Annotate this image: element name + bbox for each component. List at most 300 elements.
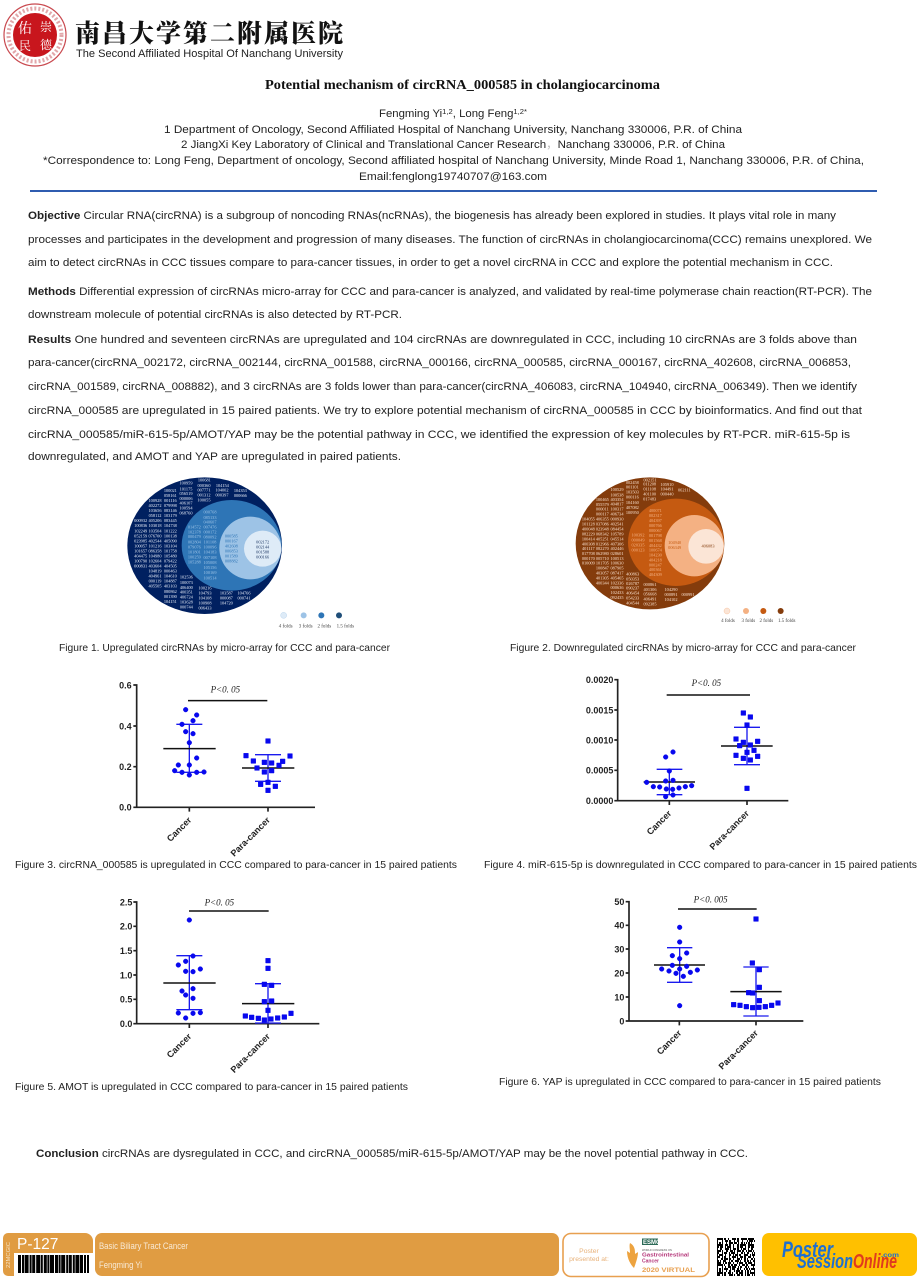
- figure 2: downregulated circRNA nested circles: 002458: [626, 480, 639, 485]
- figure 2: downregulated circRNA nested circles: 406734: [611, 512, 624, 517]
- figure 1: upregulated circRNA nested circles: 404475: [134, 553, 147, 558]
- results text block: circRNA_000585/miR-615-5p/AMOT/YAP may be the potential pathway in CCC, we identified the expression of key molecules by RT-PCR. miR-615-5p is: [28, 429, 850, 441]
- figure 1: upregulated circRNA nested circles: 104108: [199, 596, 211, 601]
- legend: fold change: 2 folds: [759, 619, 773, 624]
- figure 2: downregulated circRNA nested circles: 104940: [668, 540, 681, 545]
- figure 1: upregulated circRNA nested circles: 403103: [164, 584, 177, 589]
- figure 1: upregulated circRNA nested circles: 104738: [164, 523, 177, 528]
- footer: presented at badge: Cancer: [642, 1258, 659, 1264]
- figure 1: upregulated circRNA nested circles: 002804: [188, 539, 202, 544]
- figure 2: downregulated circRNA nested circles: 068342: [596, 531, 609, 536]
- chart: figure 3 circRNA_000585: 0.6: [119, 680, 132, 690]
- figure 2: downregulated circRNA nested circles: 404544: [626, 601, 640, 606]
- figure 2: downregulated circRNA nested circles: 406083: [702, 543, 714, 548]
- figure 2: downregulated circRNA nested circles: 400308: [582, 541, 595, 546]
- figure 2: downregulated circRNA nested circles: 401117: [582, 546, 595, 551]
- figure 1: upregulated circRNA nested circles: 000479: [188, 534, 201, 539]
- figure 1: upregulated circRNA nested circles: 103504: [149, 528, 162, 533]
- figure 2: downregulated circRNA nested circles: 026787: [626, 581, 640, 586]
- figure 1: upregulated circRNA nested circles: 102604: [149, 558, 162, 563]
- barcode: [18, 1255, 89, 1273]
- figure 1: upregulated circRNA nested circles: 000831: [134, 563, 147, 568]
- figure 2: downregulated circRNA nested circles: 400071: [649, 508, 662, 513]
- footer: poster id tab: [3, 1233, 93, 1276]
- chart: figure 6 YAP: 20: [614, 968, 624, 978]
- icon: hospital seal: 民: [19, 37, 31, 54]
- figure 2: downregulated circRNA nested circles: 101128: [582, 521, 595, 526]
- chart: figure 5 AMOT: Para-cancer: [229, 1031, 272, 1075]
- figure 1: upregulated circRNA nested circles: 104610: [164, 574, 177, 579]
- figure 1: upregulated circRNA nested circles: 102378: [188, 529, 201, 534]
- footer: presented at badge: Gastrointestinal: [642, 1252, 690, 1258]
- figure 1: upregulated circRNA nested circles: 104793: [199, 591, 211, 596]
- results text block: downregulated, and AMOT and YAP are upregulated in paired patients.: [28, 451, 401, 463]
- caption: figure 4: Figure 4. miR-615-5p is downregulated in CCC compared to para-cancer in 15 paired patients: [484, 860, 917, 871]
- title: Potential mechanism of circRNA_000585 in cholangiocarcinoma: [265, 78, 660, 93]
- figure 2: downregulated circRNA nested circles: 090237: [626, 586, 640, 591]
- figure 2: downregulated circRNA nested circles: 028601: [611, 551, 623, 556]
- figure 1: upregulated circRNA nested circles: 100681: [198, 477, 211, 482]
- figure 2: downregulated circRNA nested circles: 104491: [661, 487, 673, 492]
- figure 2: downregulated circRNA nested circles: 406491: [644, 597, 656, 602]
- figure 2: downregulated circRNA nested circles: 092435: [611, 595, 623, 600]
- figure 2: downregulated circRNA nested circles: 404432: [649, 543, 662, 548]
- figure 2: downregulated circRNA nested circles: 104160: [626, 500, 639, 505]
- footer: PosterSessionOnline logo: [762, 1233, 917, 1276]
- authors and affiliations: 1,2*: [513, 107, 527, 116]
- figure 1: upregulated circRNA nested circles: 100594: [180, 506, 193, 511]
- figure 1: upregulated circRNA nested circles: 058161: [164, 493, 177, 498]
- figure 2: downregulated circRNA nested circles: 401306: [644, 587, 657, 592]
- figure 1: upregulated circRNA nested circles: 101108: [204, 540, 216, 545]
- figure 2: downregulated circRNA nested circles: 011108: [643, 487, 656, 492]
- chart: figure 6 YAP: 50: [614, 897, 624, 907]
- figure 2: downregulated circRNA nested circles: 407306: [611, 541, 624, 546]
- chart: figure 5 AMOT: [120, 897, 319, 1075]
- figure 1: upregulated circRNA nested circles: 000006: [180, 496, 193, 501]
- chart: figure 4 miR-615-5p: 0.0005: [586, 766, 613, 776]
- figure 1: upregulated circRNA nested circles: 002144: [256, 544, 270, 549]
- figure 1: upregulated circRNA nested circles: 000585: [225, 533, 238, 538]
- figure 1: upregulated circRNA nested circles: 001589: [225, 553, 238, 558]
- figure 2: downregulated circRNA nested circles: 082270: [596, 546, 609, 551]
- QR code: [717, 1239, 755, 1275]
- figure 2: downregulated circRNA nested circles: 000049: [632, 538, 644, 543]
- figure 1: upregulated circRNA nested circles: 100096: [204, 545, 217, 550]
- figure 1: upregulated circRNA nested circles: 104183: [204, 550, 216, 555]
- figure 2: downregulated circRNA nested circles: 401100: [643, 491, 656, 496]
- figure 2: downregulated circRNA nested circles: 406355: [596, 517, 609, 522]
- figure 1: upregulated circRNA nested circles: 105156: [204, 565, 217, 570]
- chart: figure 3 circRNA_000585: [119, 680, 315, 858]
- chart: figure 6 YAP: Para-cancer: [717, 1028, 760, 1071]
- figure 1: upregulated circRNA nested circles: 068760: [180, 511, 192, 516]
- figure 1: upregulated circRNA nested circles: 105480: [164, 553, 177, 558]
- legend: fold change: 3 folds: [299, 624, 313, 629]
- figure 1: upregulated circRNA nested circles: 104002: [216, 487, 228, 492]
- figure 2: downregulated circRNA nested circles: 100950: [626, 510, 639, 515]
- figure 1: upregulated circRNA nested circles: 040607: [204, 520, 217, 525]
- figure 1: upregulated circRNA nested circles: 001390: [164, 594, 177, 599]
- figure 2: downregulated circRNA nested circles: 000891: [665, 592, 677, 597]
- figure 1: upregulated circRNA nested circles: 000360: [198, 483, 210, 488]
- figure 1: upregulated circRNA nested circles: 105288: [188, 559, 201, 564]
- chart: figure 6 YAP: 40: [614, 921, 624, 931]
- chart: figure 3 circRNA_000585: Para-cancer: [229, 815, 272, 858]
- figure 2: downregulated circRNA nested circles: 000116: [626, 495, 640, 500]
- figure 2: downregulated circRNA nested circles: 010009: [582, 561, 595, 566]
- figure 1: upregulated circRNA nested circles: 406107: [180, 501, 193, 506]
- figure 1: upregulated circRNA nested circles: 100836: [134, 523, 148, 528]
- figure 1: upregulated circRNA nested circles: 000744: [180, 605, 194, 610]
- figure 1: upregulated circRNA nested circles: 001116: [164, 498, 177, 503]
- figure 2: downregulated circRNA nested circles: 001798: [649, 533, 662, 538]
- results text block: para-cancer(circRNA_002172, circRNA_002144, circRNA_001588, circRNA_000166, circRNA_000585, circRNA_000167, circRNA_402608, circRNA_006853,: [28, 357, 851, 369]
- figure 1: upregulated circRNA nested circles: 400351: [180, 590, 193, 595]
- methods text block: Methods Differential expression of circRNAs micro-array for CCC and para-cancer is analyzed, and validated by real-time polymerase chain reaction(RT-PCR). The: [28, 286, 872, 298]
- icon: hospital seal: 崇: [40, 18, 52, 35]
- legend: fold change: 4 folds: [721, 619, 735, 624]
- figure 2: downregulated circRNA nested circles: 104055: [582, 517, 595, 522]
- figure 1: upregulated circRNA nested circles: 083146: [164, 508, 178, 513]
- figure 2: downregulated circRNA nested circles: 100465: [596, 497, 609, 502]
- figure 1: upregulated circRNA nested circles: 100169: [204, 570, 216, 575]
- figure 1: upregulated circRNA nested circles: 104766: [238, 591, 251, 596]
- figure 1: upregulated circRNA nested circles: 404961: [149, 574, 161, 579]
- figure 2: downregulated circRNA nested circles: 092385: [644, 602, 656, 607]
- figure 2: downregulated circRNA nested circles: 002317: [649, 513, 663, 518]
- figure 2: downregulated circRNA nested circles: 102336: [611, 580, 624, 585]
- figure 2: downregulated circRNA nested circles: [576, 477, 795, 624]
- figure 2: downregulated circRNA nested circles: 087905: [611, 566, 623, 571]
- figure 2: downregulated circRNA nested circles: 000170: [582, 556, 595, 561]
- footer: presented at badge: 2020 VIRTUAL: [642, 1267, 695, 1274]
- chart: figure 5 AMOT: 0.5: [120, 995, 132, 1005]
- caption: figure 5: Figure 5. AMOT is upregulated in CCC compared to para-cancer in 15 paired patients: [15, 1082, 408, 1093]
- figure 2: downregulated circRNA nested circles: 100538: [611, 492, 623, 497]
- figure 1: upregulated circRNA nested circles: 000167: [225, 538, 239, 543]
- legend: fold change: 3 folds: [741, 619, 755, 624]
- chart: figure 3 circRNA_000585: P<0. 05: [210, 684, 241, 694]
- chart: figure 3 circRNA_000585: 0.0: [119, 803, 132, 813]
- figure 1: upregulated circRNA nested circles: 104819: [149, 569, 161, 574]
- figure 1: upregulated circRNA nested circles: 103179: [164, 513, 177, 518]
- figure 1: upregulated circRNA nested circles: 406400: [180, 585, 193, 590]
- caption: figure 1: Figure 1. Upregulated circRNAs by micro-array for CCC and para-cancer: [59, 643, 391, 654]
- conclusion text: Conclusion circRNAs are dysregulated in CCC, and circRNA_000585/miR-615-5p/AMOT/YAP may be the novel potential pathway in CCC.: [36, 1148, 748, 1160]
- figure 1: upregulated circRNA nested circles: 080862: [164, 589, 177, 594]
- figure 2: downregulated circRNA nested circles: 001101: [626, 485, 639, 490]
- chart: figure 3 circRNA_000585: 0.4: [119, 721, 132, 731]
- figure 1: upregulated circRNA nested circles: 101758: [164, 548, 177, 553]
- figure 2: downregulated circRNA nested circles: 020335: [632, 543, 644, 548]
- figure 2: downregulated circRNA nested circles: 400361: [649, 567, 662, 572]
- figure 1: upregulated circRNA nested circles: 056519: [180, 491, 192, 496]
- figure 1: upregulated circRNA nested circles: 001588: [256, 549, 269, 554]
- icon: wheat emblem: [627, 1243, 638, 1268]
- figure 1: upregulated circRNA nested circles: 052159: [134, 533, 147, 538]
- chart: figure 5 AMOT: P<0. 05: [204, 897, 235, 907]
- figure 2: downregulated circRNA nested circles: 103503: [626, 490, 639, 495]
- authors and affiliations: *Correspondence to: Long Feng, Department of oncology, Second affiliated hospital of Nanchang University, Minde Road 1, Nanchang 330006, P.R. of China,: [43, 155, 864, 167]
- caption: figure 6: Figure 6. YAP is upregulated in CCC compared to para-cancer in 15 paired patients: [499, 1077, 881, 1088]
- figure 1: upregulated circRNA nested circles: 403604: [149, 563, 162, 568]
- figure 2: downregulated circRNA nested circles: 011208: [643, 482, 656, 487]
- figure 1: upregulated circRNA nested circles: 104980: [149, 553, 161, 558]
- figure 2: downregulated circRNA nested circles: 100674: [649, 548, 663, 553]
- figure 2: downregulated circRNA nested circles: 000067: [649, 528, 663, 533]
- icon: hospital seal: 佑: [18, 18, 32, 38]
- figure 1: upregulated circRNA nested circles: 080092: [204, 535, 216, 540]
- results text block: Results One hundred and seventeen circRNAs are upregulated and 104 circRNAs are downregulated in CCC, including 10 circRNAs are 3 folds above than: [28, 334, 857, 346]
- chart: figure 6 YAP: Cancer: [655, 1028, 684, 1057]
- figure 1: upregulated circRNA nested circles: 000172: [204, 530, 216, 535]
- figure 2: downregulated circRNA nested circles: 001568: [649, 538, 662, 543]
- figure 2: downregulated circRNA nested circles: 012966: [596, 541, 610, 546]
- figure 2: downregulated circRNA nested circles: 062980: [596, 551, 609, 556]
- figure 1: upregulated circRNA nested circles: 007476: [204, 525, 217, 530]
- figure 1: upregulated circRNA nested circles: [127, 477, 354, 629]
- figure 1: upregulated circRNA nested circles: 000932: [134, 518, 147, 523]
- figure 1: upregulated circRNA nested circles: 006433: [199, 606, 211, 611]
- figure 2: downregulated circRNA nested circles: 000991: [682, 592, 694, 597]
- figure 2: downregulated circRNA nested circles: 002151: [644, 477, 656, 482]
- figure 1: upregulated circRNA nested circles: 006853: [225, 548, 238, 553]
- caption: figure 2: Figure 2. Downregulated circRNAs by micro-array for CCC and para-cancer: [510, 643, 857, 654]
- figure 1: upregulated circRNA nested circles: 000166: [256, 555, 270, 560]
- methods text block: [28, 286, 872, 321]
- chart: figure 3 circRNA_000585: 0.2: [119, 762, 132, 772]
- footer: PosterSessionOnline logo: Poster: [782, 1237, 834, 1262]
- footer: session and presenter bar: [95, 1233, 559, 1276]
- caption: figure 3: Figure 3. circRNA_000585 is upregulated in CCC compared to para-cancer in 15 paired patients: [15, 860, 457, 871]
- chart: figure 4 miR-615-5p: Cancer: [645, 808, 674, 837]
- footer: PosterSessionOnline logo: Online: [853, 1251, 897, 1273]
- figure 2: downregulated circRNA nested circles: 404817: [611, 502, 624, 507]
- chart: figure 5 AMOT: 0.0: [120, 1019, 132, 1029]
- figure 1: upregulated circRNA nested circles: 000397: [216, 493, 229, 498]
- figure 2: downregulated circRNA nested circles: 100513: [611, 556, 623, 561]
- figure 1: upregulated circRNA nested circles: 103656: [149, 508, 162, 513]
- chart: figure 5 AMOT: 2.0: [120, 922, 132, 932]
- figure 1: upregulated circRNA nested circles: 007108: [204, 555, 216, 560]
- figure 1: upregulated circRNA nested circles: 100514: [204, 575, 217, 580]
- footer: presented at badge: presented at:: [569, 1256, 609, 1263]
- results text block: circRNA_000585 are upregulated in 15 paired patients. We try to explore potential mechanism of circRNA_000585 in CCC by bioinformatics. And find out that: [28, 405, 863, 417]
- figure 1: upregulated circRNA nested circles: 100259: [188, 554, 201, 559]
- figure 1: upregulated circRNA nested circles: 000463: [164, 569, 177, 574]
- figure 2: downregulated circRNA nested circles: 062111: [678, 488, 691, 493]
- methods text block: downstream molecule of potential circRNAs is also detected by RT-PCR.: [28, 309, 402, 321]
- figure 2: downregulated circRNA nested circles: 045514: [611, 536, 624, 541]
- authors and affiliations: 2 JiangXi Key Laboratory of Clinical and Translational Cancer Research ，Nanchang 330006, P.R. of China: [181, 139, 726, 151]
- legend: fold change: 1.5 folds: [778, 619, 795, 624]
- figure 2: downregulated circRNA nested circles: 082229: [582, 531, 595, 536]
- chart: figure 4 miR-615-5p: 0.0015: [586, 705, 613, 715]
- chart: figure 4 miR-615-5p: 0.0020: [586, 675, 613, 685]
- legend: fold change: [721, 608, 795, 624]
- figure 2: downregulated circRNA nested circles: 403057: [596, 571, 610, 576]
- hospital name in Chinese: 南昌大学第二附属医院: [75, 14, 343, 50]
- figure 1: upregulated circRNA nested circles: 103587: [220, 591, 234, 596]
- figure 1: upregulated circRNA nested circles: 002172: [256, 539, 269, 544]
- figure 2: downregulated circRNA nested circles: 402446: [611, 546, 624, 551]
- footer: presented at badge: [563, 1234, 709, 1276]
- figure 1: upregulated circRNA nested circles: 014572: [188, 524, 201, 529]
- figure 2: downregulated circRNA nested circles: 017708: [582, 551, 595, 556]
- figure 1: upregulated circRNA nested circles: 101222: [164, 528, 177, 533]
- legend: fold change: 4 folds: [279, 624, 293, 629]
- figure 2: downregulated circRNA nested circles: 104290: [665, 587, 677, 592]
- figure 1: upregulated circRNA nested circles: 001312: [198, 492, 210, 497]
- chart: figure 5 AMOT: 1.5: [120, 946, 132, 956]
- chart: figure 6 YAP: 0: [619, 1016, 624, 1026]
- chart: figure 6 YAP: P<0. 005: [693, 895, 728, 905]
- chart: figure 4 miR-615-5p: 0.0010: [586, 735, 613, 745]
- figure 2: downregulated circRNA nested circles: 100630: [611, 561, 623, 566]
- footer: presented at badge: Poster: [579, 1248, 600, 1255]
- figure 2: downregulated circRNA nested circles: 084454: [611, 527, 624, 532]
- figure 1: upregulated circRNA nested circles: 102536: [180, 575, 194, 580]
- figure 2: downregulated circRNA nested circles: 056668: [644, 592, 656, 597]
- figure 1: upregulated circRNA nested circles: 100073: [180, 580, 193, 585]
- figure 1: upregulated circRNA nested circles: 405206: [149, 518, 162, 523]
- figure 2: downregulated circRNA nested circles: 404397: [649, 518, 663, 523]
- chart: figure 3 circRNA_000585: Cancer: [165, 815, 194, 844]
- chart: figure 6 YAP: [614, 895, 803, 1071]
- figure 2: downregulated circRNA nested circles: 100847: [596, 566, 610, 571]
- figure 1: upregulated circRNA nested circles: 100057: [134, 543, 148, 548]
- figure 2: downregulated circRNA nested circles: 054233: [626, 596, 639, 601]
- figure 1: upregulated circRNA nested circles: 406724: [180, 595, 194, 600]
- figure 2: downregulated circRNA nested circles: 401305: [596, 575, 609, 580]
- figure 1: upregulated circRNA nested circles: 100790: [134, 558, 147, 563]
- figure 1: upregulated circRNA nested circles: 079076: [188, 544, 202, 549]
- figure 1: upregulated circRNA nested circles: 000666: [234, 493, 248, 498]
- figure 2: downregulated circRNA nested circles: 017483: [643, 496, 656, 501]
- figure 2: downregulated circRNA nested circles: 100317: [611, 507, 624, 512]
- objective text block: aim to detect circRNAs in CCC tissues compare to para-cancer tissues, in order to get a novel circRNA in CCC and explore the potential mechanism in CCC.: [28, 257, 833, 269]
- figure 1: upregulated circRNA nested circles: 100216: [199, 586, 212, 591]
- figure 1: upregulated circRNA nested circles: 076700: [149, 533, 161, 538]
- figure 2: downregulated circRNA nested circles: 104102: [665, 597, 677, 602]
- figure 1: upregulated circRNA nested circles: 402608: [225, 543, 238, 548]
- figure 2: downregulated circRNA nested circles: 006349: [668, 545, 681, 550]
- figure 2: downregulated circRNA nested circles: 000766: [649, 523, 663, 528]
- figure 1: upregulated circRNA nested circles: 402544: [149, 539, 162, 544]
- figure 1: upregulated circRNA nested circles: 058112: [149, 513, 161, 518]
- figure 1: upregulated circRNA nested circles: 104151: [164, 599, 177, 604]
- figure 2: downregulated circRNA nested circles: 100529: [611, 487, 623, 492]
- icon: hospital seal: [4, 4, 66, 66]
- objective text block: [28, 210, 872, 269]
- figure 1: upregulated circRNA nested circles: 104887: [164, 579, 178, 584]
- footer: presented at badge: WORLD CONGRESS ON: [642, 1248, 672, 1252]
- figure 2: downregulated circRNA nested circles: 402541: [611, 521, 623, 526]
- figure 1: upregulated circRNA nested circles: 104353: [234, 488, 247, 493]
- legend: fold change: 1.5 folds: [337, 624, 354, 629]
- chart: figure 4 miR-615-5p: Para-cancer: [708, 808, 751, 852]
- figure 2: downregulated circRNA nested circles: 404309: [649, 572, 662, 577]
- figure 1: upregulated circRNA nested circles: 103628: [180, 600, 193, 605]
- figure 2: downregulated circRNA nested circles: 000861: [644, 582, 656, 587]
- figure 2: downregulated circRNA nested circles: 407082: [626, 505, 639, 510]
- figure 2: downregulated circRNA nested circles: 404218: [649, 557, 662, 562]
- figure 2: downregulated circRNA nested circles: 000011: [596, 507, 609, 512]
- chart: figure 6 YAP: 30: [614, 944, 624, 954]
- figure 1: upregulated circRNA nested circles: 102249: [134, 528, 147, 533]
- figure 1: upregulated circRNA nested circles: 103104: [164, 543, 178, 548]
- figure 2: downregulated circRNA nested circles: 105910: [661, 482, 673, 487]
- figure 1: upregulated circRNA nested circles: 000119: [149, 579, 161, 584]
- results text block: circRNA_001589, circRNA_008882), and 3 circRNAs are 3 folds lower than para-cancer(circRNA_406083, circRNA_104940, circRNA_006349). Then we identify: [28, 381, 857, 393]
- objective text block: Objective Circular RNA(circRNA) is a subgroup of noncoding RNAs(ncRNAs), the biogenesis has already been explored in studies. It plays vital role in many: [28, 210, 836, 222]
- figure 1: upregulated circRNA nested circles: 085133: [204, 515, 216, 520]
- hospital logo header: [4, 4, 344, 66]
- chart: figure 4 miR-615-5p: P<0. 05: [691, 678, 722, 688]
- chart: figure 5 AMOT: 2.5: [120, 897, 132, 907]
- poster number: P-127: [17, 1236, 58, 1253]
- figure 1: upregulated circRNA nested circles: 079422: [164, 558, 177, 563]
- footer: PosterSessionOnline logo: .com: [881, 1253, 899, 1259]
- figure 2: downregulated circRNA nested circles: 400344: [596, 580, 610, 585]
- figure 2: downregulated circRNA nested circles: 100392: [632, 533, 644, 538]
- figure 1: upregulated circRNA nested circles: 086358: [149, 548, 161, 553]
- authors and affiliations: 1 Department of Oncology, Second Affiliated Hospital of Nanchang University, Nanchang 330006, P.R. of China: [164, 124, 743, 136]
- chart: figure 4 miR-615-5p: 0.0000: [586, 796, 613, 806]
- figure 2: downregulated circRNA nested circles: 037086: [596, 521, 610, 526]
- figure 1: upregulated circRNA nested circles: 000741: [238, 596, 250, 601]
- figure 1: upregulated circRNA nested circles: 405505: [149, 584, 161, 589]
- figure 2: downregulated circRNA nested circles: 101705: [596, 561, 609, 566]
- figure 1: upregulated circRNA nested circles: 104720: [220, 601, 233, 606]
- chart: figure 5 AMOT: Cancer: [165, 1031, 194, 1060]
- legend: fold change: [279, 612, 354, 629]
- figure 2: downregulated circRNA nested circles: 406454: [626, 591, 640, 596]
- figure 2: downregulated circRNA nested circles: 100414: [582, 536, 596, 541]
- figure 1: upregulated circRNA nested circles: 404505: [164, 563, 177, 568]
- figure 1: upregulated circRNA nested circles: 100055: [198, 497, 210, 502]
- figure 1: upregulated circRNA nested circles: 100928: [149, 498, 161, 503]
- legend: fold change: 2 folds: [317, 624, 331, 629]
- figure 2: downregulated circRNA nested circles: 087417: [611, 571, 624, 576]
- figure 1: upregulated circRNA nested circles: 007771: [198, 487, 210, 492]
- footer: session and presenter bar: Fengming Yi: [99, 1260, 142, 1270]
- figure 1: upregulated circRNA nested circles: 402272: [149, 503, 161, 508]
- hospital name in English: The Second Affiliated Hospital Of Nanchang University: [76, 48, 344, 60]
- ESMO mark: ESMO: [643, 1240, 661, 1246]
- figure 1: upregulated circRNA nested circles: 100138: [164, 533, 177, 538]
- figure 2: downregulated circRNA nested circles: 000930: [611, 517, 623, 522]
- figure 2: downregulated circRNA nested circles: 104230: [649, 553, 662, 558]
- figure 2: downregulated circRNA nested circles: 000247: [649, 562, 663, 567]
- figure 1: upregulated circRNA nested circles: 100021: [164, 488, 177, 493]
- figure 2: downregulated circRNA nested circles: 000117: [596, 512, 610, 517]
- figure 2: downregulated circRNA nested circles: 023948: [596, 527, 609, 532]
- footer: poster id tab: 22MCGIC: [6, 1242, 12, 1268]
- figure 2: downregulated circRNA nested circles: 000440: [661, 492, 673, 497]
- figure 1: upregulated circRNA nested circles: 101801: [188, 549, 201, 554]
- objective text block: processes and participates in the development and progression of many diseases. The function of circRNAs in cholangiocarcinoma(CCC) remains unexplored. We: [28, 234, 872, 246]
- figure 2: downregulated circRNA nested circles: 055579: [596, 502, 609, 507]
- figure 1: upregulated circRNA nested circles: 023985: [134, 539, 147, 544]
- figure 1: upregulated circRNA nested circles: 008882: [225, 558, 238, 563]
- figure 2: downregulated circRNA nested circles: 105789: [611, 531, 623, 536]
- icon: hospital seal: 德: [40, 36, 53, 53]
- footer: PosterSessionOnline logo: Session: [797, 1251, 853, 1273]
- figure 2: downregulated circRNA nested circles: 102433: [611, 590, 623, 595]
- figure 2: downregulated circRNA nested circles: 005710: [596, 556, 609, 561]
